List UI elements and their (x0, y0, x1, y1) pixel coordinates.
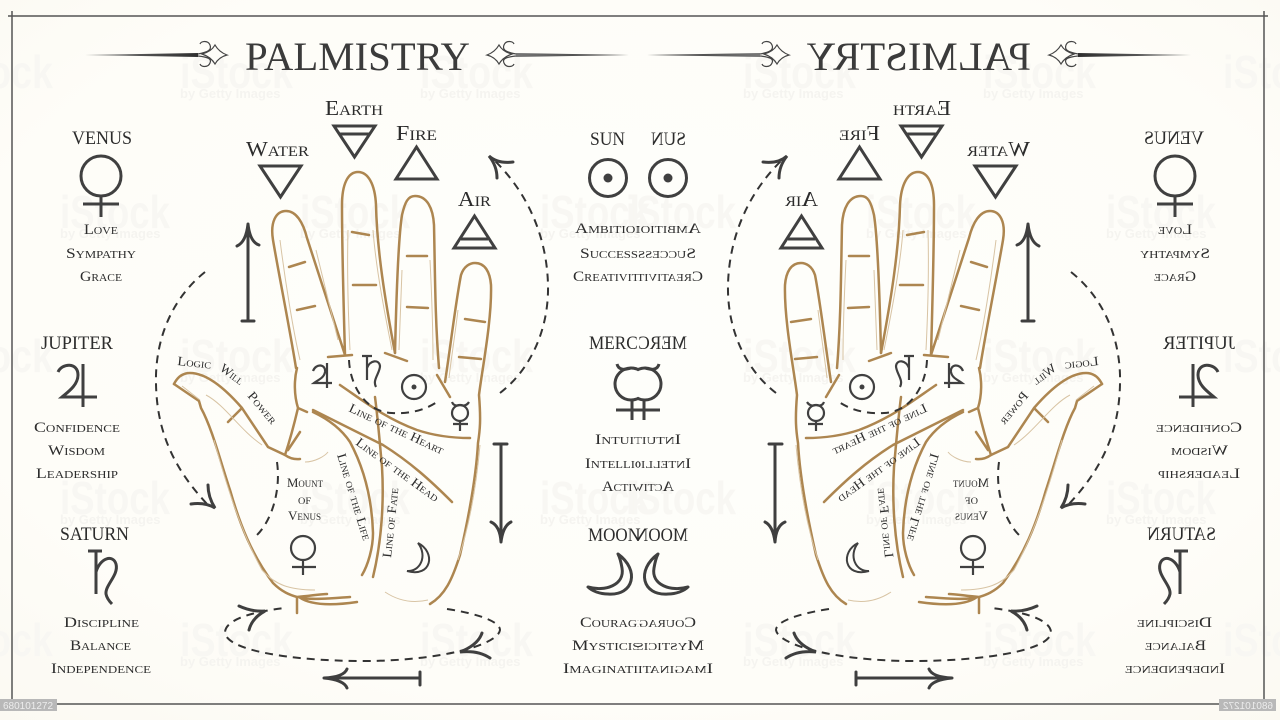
stock watermarks: iStock (866, 472, 976, 524)
mirrored palm planet symbols (807, 355, 985, 575)
mirrored arrow: outer dashed arc (728, 156, 787, 393)
stock watermarks: by Getty Images (866, 226, 966, 241)
mirrored element: earth (893, 96, 951, 157)
stock watermarks: by Getty Images (540, 512, 640, 527)
mirrored palm labels: Line of the Head (833, 434, 923, 505)
palm labels (177, 353, 447, 558)
mirrored element: water (967, 137, 1030, 197)
mirrored palm labels: Line of the Heart (829, 400, 929, 457)
mirrored planet block: venus (1140, 128, 1210, 285)
mirrored planet block: moon: Imagination (618, 661, 713, 677)
stock watermarks: by Getty Images (743, 370, 843, 385)
planet block: moon: Mysticism (572, 638, 652, 654)
mirrored planet block: mercury: MERCURY (603, 333, 687, 354)
mirrored planet block: moon: Courage (631, 615, 696, 631)
mirrored element: air (781, 187, 822, 248)
stock watermarks: iStock (1106, 472, 1216, 524)
mirrored planet block: mercury (638, 336, 690, 491)
stock watermarks: iStock (420, 46, 533, 98)
mirrored arrow: down (765, 444, 785, 542)
stock watermarks: iStock (866, 186, 976, 238)
palm labels: Logic (177, 353, 212, 372)
mirrored element: fire: Fire (839, 121, 880, 145)
mirrored planet block: sun: Success (638, 246, 696, 262)
arrow: thumb dashed arc (156, 272, 215, 508)
planet block: mercury: Activity (602, 479, 660, 495)
stock watermarks: by Getty Images (1106, 512, 1206, 527)
element: fire: Fire (396, 121, 437, 145)
mirrored element: water: Water (967, 137, 1030, 161)
mirrored dashed ring: saturn mount (839, 360, 927, 413)
planet block: jupiter: JUPITER (41, 333, 113, 354)
stock watermarks: iStock (60, 472, 170, 524)
mirrored image id stamp (1219, 699, 1276, 711)
stock watermarks: by Getty Images (743, 654, 843, 669)
mirrored planet block: venus: VENUS (1144, 128, 1204, 149)
mirrored planet block: jupiter: Wisdom (1171, 443, 1228, 459)
stock watermarks: by Getty Images (983, 370, 1083, 385)
stock watermarks: by Getty Images (300, 226, 400, 241)
planet block: saturn: SATURN (60, 524, 129, 545)
planet block: mercury (586, 336, 638, 491)
stock watermarks: by Getty Images (743, 86, 843, 101)
mirrored dashed arc: mount of venus (998, 462, 1019, 535)
mirrored element: fire (839, 121, 880, 179)
planet block: mercury: Intelligence (585, 456, 677, 472)
planet block: sun: Creativity (573, 269, 648, 285)
arrow: outer dashed arc (489, 156, 548, 393)
planet block: sun: SUN (590, 129, 625, 150)
mirrored palm labels: Line of the Life (901, 451, 942, 542)
palm labels: of (298, 492, 311, 507)
palm labels: Mount (287, 475, 323, 490)
planet block: venus: Grace (80, 269, 122, 285)
palm lines (313, 385, 470, 577)
element: water (246, 137, 309, 197)
palm labels: Line of the Life (334, 451, 375, 542)
stock watermarks: iStock (60, 186, 170, 238)
mirrored finger creases (791, 232, 987, 359)
arrow: wrist dashed ellipse (225, 606, 500, 661)
mirrored planet block: sun: SUN (651, 129, 686, 150)
mirrored planet block: mercury: Intuition (609, 432, 681, 448)
stock watermarks: by Getty Images (60, 512, 160, 527)
mirrored planet block: sun (638, 132, 702, 281)
mirrored planet block: sun: Creativity (628, 269, 703, 285)
stock watermarks: iStock (540, 472, 650, 524)
stock watermarks: by Getty Images (420, 654, 520, 669)
element: water: Water (246, 137, 309, 161)
palm labels: Line of the Head (353, 434, 443, 505)
stock watermarks: iStock (420, 330, 533, 382)
stock watermarks: iStock (540, 186, 650, 238)
planet block: jupiter: Leadership (36, 466, 118, 482)
mirrored planet block: moon (638, 528, 712, 673)
mirrored palm labels (829, 353, 1099, 558)
element: earth: Earth (325, 96, 383, 120)
arrow: left (324, 669, 420, 688)
planet block: saturn: Independence (51, 661, 151, 677)
planet block: saturn: Discipline (64, 615, 139, 631)
stock watermarks: iStock (180, 46, 293, 98)
mirrored title ornament: inner (647, 42, 789, 66)
mirrored element: air: Air (785, 187, 818, 211)
stock watermarks: by Getty Images (180, 370, 280, 385)
mirrored title ornament: outer (1049, 42, 1191, 66)
dashed arc: mount of venus (257, 462, 278, 535)
mirrored hand outline (785, 172, 1102, 613)
mirrored planet block: sun: Ambition (631, 221, 701, 237)
planet block: venus: Sympathy (66, 246, 136, 262)
palm planet symbols (291, 355, 469, 575)
planet block: jupiter (34, 333, 120, 482)
planet block: sun: Ambition (575, 221, 645, 237)
mirrored title: PALMISTRY (806, 34, 1031, 79)
panel: right half (mirrored) (599, 11, 1280, 712)
mirrored palm labels: of (965, 492, 978, 507)
stock watermarks: by Getty Images (540, 226, 640, 241)
mirrored planet block: venus: Sympathy (1140, 246, 1210, 262)
palm labels: Power (245, 388, 281, 427)
mirrored image id stamp: 680101272 (1223, 701, 1273, 712)
mirrored planet block: saturn (1125, 524, 1225, 677)
stock watermarks: by Getty Images (1106, 226, 1206, 241)
stock watermarks: iStock (626, 472, 736, 524)
planet block: jupiter: Confidence (34, 420, 120, 436)
planet block: venus: VENUS (72, 128, 132, 149)
stock watermarks: iStock (743, 614, 856, 666)
mirrored planet block: mercury: Intelligence (599, 456, 691, 472)
element: fire (396, 121, 437, 179)
stock watermarks: iStock (1106, 186, 1216, 238)
planet block: mercury: Intuition (595, 432, 667, 448)
stock watermarks: iStock (743, 330, 856, 382)
stock watermarks: by Getty Images (983, 654, 1083, 669)
mirrored palm labels: Line of Fate (875, 487, 897, 558)
stock watermarks: iStock (300, 186, 410, 238)
hand outline (174, 172, 491, 613)
title: PALMISTRY (245, 34, 470, 79)
planet block: saturn (51, 524, 151, 677)
stock watermarks: by Getty Images (60, 226, 160, 241)
stock watermarks: iStock (420, 614, 533, 666)
stock watermarks: iStock (180, 614, 293, 666)
mirrored arrow: wrist dashed ellipse (776, 606, 1051, 661)
mirrored arrow: thumb dashed arc (1061, 272, 1120, 508)
stock watermarks: iStock (180, 330, 293, 382)
palm labels: Line of the Heart (347, 400, 447, 457)
mirrored planet block: jupiter: Confidence (1156, 420, 1242, 436)
mirrored palm labels: Venus (955, 508, 988, 523)
stock watermarks: iStock (983, 614, 1096, 666)
title ornament: right (487, 42, 629, 66)
planet block: venus (66, 128, 136, 285)
mirrored planet block: saturn: SATURN (1147, 524, 1216, 545)
mirrored planet block: saturn: Balance (1145, 638, 1206, 654)
mirrored palm labels: Power (995, 388, 1031, 427)
planet block: moon (564, 528, 638, 673)
stock watermarks: iStock (743, 46, 856, 98)
stock watermarks: iStock (300, 472, 410, 524)
mirrored palm lines (806, 385, 963, 577)
palm labels: Line of Fate (379, 487, 401, 558)
stock watermarks: iStock (983, 330, 1096, 382)
palm labels: Will (217, 360, 247, 388)
arrow: down (491, 444, 511, 542)
stock watermarks: by Getty Images (180, 86, 280, 101)
mirrored arrow: horizontal (856, 669, 952, 688)
mirrored planet block: moon: Mysticism (624, 638, 704, 654)
element: air: Air (458, 187, 491, 211)
mirrored palm labels: Mount (953, 475, 989, 490)
stock watermarks: by Getty Images (983, 86, 1083, 101)
mirrored planet block: jupiter: JUPITER (1163, 333, 1235, 354)
mirrored planet block: jupiter (1156, 333, 1242, 482)
arrow: up (237, 224, 259, 321)
image id stamp: 680101272 (3, 701, 53, 712)
title ornament: left (85, 42, 227, 66)
planet block: moon: Imagination (563, 661, 658, 677)
stock watermarks: by Getty Images (866, 512, 966, 527)
mirrored palm labels: Will (1029, 360, 1059, 388)
planet block: sun: Success (580, 246, 638, 262)
mirrored planet block: jupiter: Leadership (1158, 466, 1240, 482)
planet block: moon: MOON (588, 525, 640, 546)
stock watermarks: by Getty Images (420, 86, 520, 101)
planet block: saturn: Balance (70, 638, 131, 654)
mirrored planet block: saturn: Discipline (1137, 615, 1212, 631)
dashed ring: saturn mount (349, 360, 437, 413)
panel: left half (0, 11, 677, 712)
mirrored element: earth: Earth (893, 96, 951, 120)
planet block: jupiter: Wisdom (48, 443, 105, 459)
mirrored planet block: moon: MOON (636, 525, 688, 546)
mirrored planet block: mercury: Activity (616, 479, 674, 495)
element: air (454, 187, 495, 248)
mirrored planet block: venus: Grace (1154, 269, 1196, 285)
stock watermarks: by Getty Images (180, 654, 280, 669)
planet block: moon: Courage (580, 615, 645, 631)
element: earth (325, 96, 383, 157)
mirrored palm labels: Logic (1064, 353, 1099, 372)
palm labels: Venus (288, 508, 321, 523)
stock watermarks: by Getty Images (300, 512, 400, 527)
planet block: sun (574, 132, 638, 281)
stock watermarks: iStock (626, 186, 736, 238)
mirrored planet block: saturn: Independence (1125, 661, 1225, 677)
planet block: mercury: MERCURY (589, 333, 673, 354)
stock watermarks: by Getty Images (420, 370, 520, 385)
stock watermarks: iStock (983, 46, 1096, 98)
mirrored planet block: venus: Love (1158, 222, 1192, 238)
mirrored arrow: up (1017, 224, 1039, 321)
finger creases (289, 232, 485, 359)
planet block: venus: Love (84, 222, 118, 238)
